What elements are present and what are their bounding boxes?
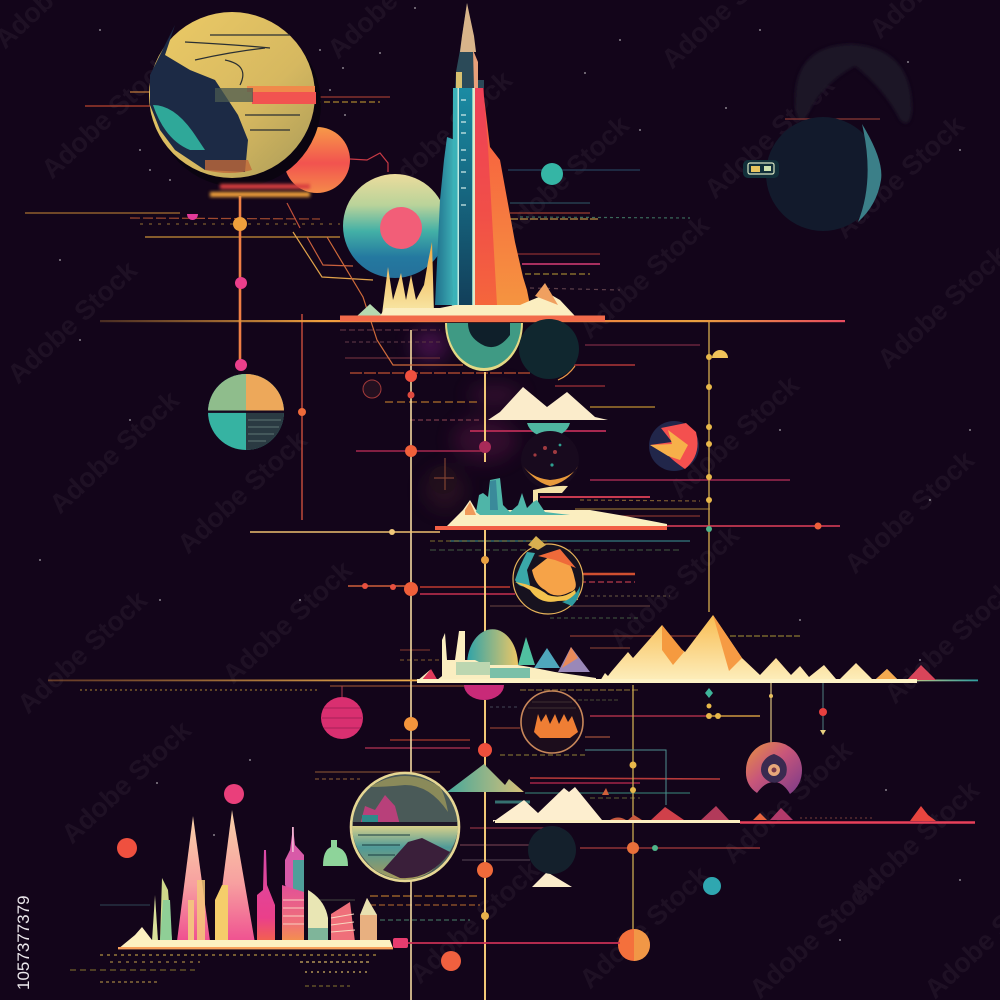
vertical connector lines: [240, 153, 823, 1000]
magenta cap under line: [464, 685, 504, 700]
central tower: [435, 3, 530, 308]
watermark: Adobe Stock: Adobe Stock: [717, 734, 858, 869]
orange sun: [284, 127, 350, 193]
watermark: Adobe Stock: Adobe Stock: [44, 384, 185, 519]
vinyl planet: [746, 742, 802, 794]
watermark: Adobe Stock: Adobe Stock: [56, 714, 197, 849]
tower base skyline: [357, 242, 575, 316]
pie planet: [649, 421, 699, 471]
orange bubble planet: [513, 536, 583, 614]
watermark: Adobe Stock: Adobe Stock: [12, 584, 153, 719]
satellite: [743, 160, 779, 178]
watermark: Adobe Stock: Adobe Stock: [494, 109, 635, 244]
nodes: [117, 217, 827, 971]
triangle on lower axis: [447, 764, 524, 792]
dark crescent top-right: [795, 44, 912, 123]
lower mid skyline: [417, 629, 596, 681]
watermark: Adobe Stock: Adobe Stock: [829, 109, 970, 244]
soft magenta smears: [412, 329, 521, 510]
left hanging ball: [208, 374, 284, 450]
pyramid range: [417, 615, 936, 683]
watermark: Adobe Stock: Adobe Stock: [36, 49, 177, 184]
magenta hanging ball: [321, 686, 363, 739]
dark planet with crescent: [766, 117, 881, 231]
lower mountains: [493, 787, 936, 887]
watermark: Adobe Stock: Adobe Stock: [844, 774, 985, 909]
main horizontal lines: [48, 320, 978, 822]
faint red streak: [785, 118, 880, 120]
twin peak mountains and small globe: [488, 387, 608, 437]
watermark: Adobe Stock: Adobe Stock: [699, 69, 840, 204]
dark striped globe: [519, 319, 579, 380]
stock id: 1057377379: [14, 895, 33, 990]
large planet: earth: [149, 12, 321, 187]
dark speckled cluster: [429, 458, 457, 494]
watermark: Adobe Stock: Adobe Stock: [2, 254, 143, 389]
mid skyline: [435, 478, 667, 530]
big glass globe with landscape: [351, 773, 459, 881]
glass bubble with orange flames: [521, 691, 583, 753]
earth base glow: [210, 184, 310, 197]
watermark: Adobe Stock: Adobe Stock: [664, 369, 805, 504]
small teal dot: [541, 163, 563, 185]
small magenta cap: [187, 214, 198, 220]
half disc beneath tower: [445, 323, 523, 371]
watermark: Adobe Stock: Adobe Stock: [604, 519, 745, 654]
watermark: Adobe Stock: Adobe Stock: [574, 209, 715, 344]
glitch streak field: [25, 92, 800, 986]
dark speckled globe: [521, 431, 579, 504]
watermark: Adobe Stock: Adobe Stock: [839, 444, 980, 579]
watermark: Adobe Stock: Adobe Stock: [217, 554, 358, 689]
bottom-left city: [118, 810, 393, 949]
teal planet with pink core: [343, 174, 447, 278]
glowing base bar: [340, 316, 605, 322]
watermark: Adobe Stock: Adobe Stock: [574, 859, 715, 994]
watermark: Adobe Stock: Adobe Stock: [377, 64, 518, 199]
watermark: Adobe Stock: Adobe Stock: [172, 424, 313, 559]
watermark: Adobe Stock: Adobe Stock: [404, 854, 545, 989]
